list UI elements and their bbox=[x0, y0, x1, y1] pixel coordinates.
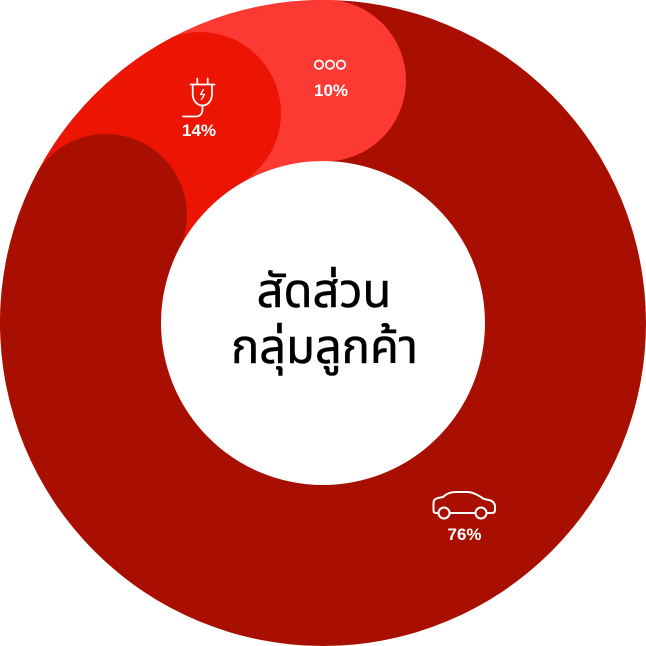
label: 10%: 10% bbox=[314, 81, 348, 100]
label: 14%: 14% bbox=[182, 121, 216, 140]
segment: 14% electric bbox=[106, 113, 200, 215]
icon: car bbox=[434, 492, 495, 518]
center title bbox=[231, 264, 418, 375]
segment: 10% others bbox=[200, 80, 325, 113]
label: 76%: 76% bbox=[447, 525, 482, 544]
donut segments bbox=[80, 80, 566, 566]
center title: สัดส่วน bbox=[257, 264, 391, 317]
icon: electric plug bbox=[183, 78, 214, 116]
segment: 76% car rounded end bbox=[80, 215, 106, 323]
segment: base ring 76% bbox=[80, 80, 566, 566]
center title: กลุ่มลูกค้า bbox=[231, 320, 418, 375]
center hole bbox=[161, 161, 485, 485]
icon: three circles bbox=[315, 60, 345, 69]
